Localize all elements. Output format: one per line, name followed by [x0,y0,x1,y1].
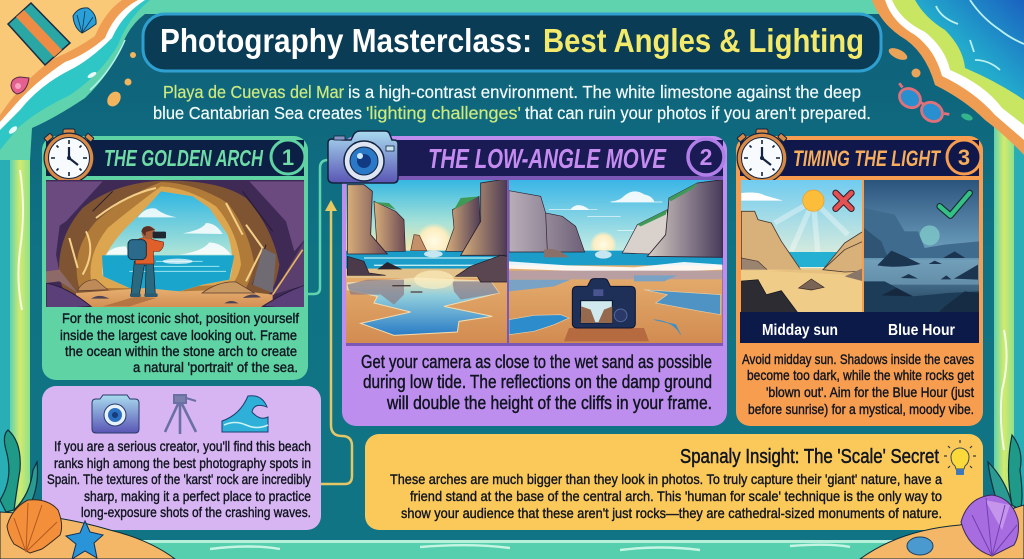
intro text: 'lighting challenges' [366,103,521,123]
body text: show your audience that these aren't just rocks—they are cathedral-sized monuments of nature. [401,505,942,521]
header: TIMING THE LIGHT [793,146,941,171]
body text: before sunrise) for a mystical, moody vibe. [748,401,974,417]
body text: ranks high among the best photography spots in [54,455,311,471]
body text: the ocean within the stone arch to create [65,343,297,359]
body text: inside the largest cave looking out. Frame [60,327,297,343]
icon: orange shell [7,500,62,553]
body text: For the most iconic shot, position yourself [62,310,299,326]
header: 2 [700,144,712,170]
intro text: blue Cantabrian Sea creates [153,103,362,123]
icon: blue pebble [907,537,933,555]
heading: Spanaly Insight: The 'Scale' Secret [680,446,939,468]
panel: timing the light [736,129,983,426]
header: 1 [282,145,294,170]
title banner: Best Angles & Lighting [543,22,864,59]
body text [390,471,942,521]
bottom-left beach [0,430,175,559]
body text: friend stand at the base of the central arch. This 'human for scale' technique is the only way to [410,488,942,504]
body text: become too dark, while the white rocks get [747,367,974,383]
icon: camera on sand [572,279,635,328]
body text [60,310,299,375]
intro text: Playa de Cuevas del Mar [163,82,344,102]
icon: stopwatch [736,129,788,184]
icon: sunglasses [891,81,950,128]
header: 3 [958,145,970,170]
icon: blue starfish [66,521,103,559]
panel: serious creator tip [42,386,321,530]
body text: Spain. The textures of the 'karst' rock are incredibly [47,471,311,487]
bottom-right beach [860,435,1024,559]
top-left beach corner [0,0,170,160]
body text: a natural 'portrait' of the sea. [133,359,298,375]
icon: pink snail shell [11,77,29,94]
intro text [153,82,871,123]
icon: header camera [328,131,398,183]
header: THE LOW-ANGLE MOVE [428,143,667,174]
intro text: that can ruin your photos if you aren't prepared. [525,103,871,123]
header [346,139,724,176]
body text [361,352,712,413]
illustration: low angle right [509,178,722,346]
body text: Get your camera as close to the wet sand as possible [361,352,712,372]
icon: seaweed [988,435,1022,510]
body text: Avoid midday sun. Shadows inside the caves [742,351,974,367]
panel: the low-angle move [342,136,727,426]
icon: tripod [165,395,196,434]
header [740,140,981,176]
panel: the golden arch [42,129,308,380]
panel: spanaly insight [365,434,983,530]
icon: blue shell [73,8,96,33]
icon: beach towel [8,3,70,65]
icon: stopwatch [44,129,94,184]
body text: long-exposure shots of the crashing waves. [81,504,311,520]
body text: 'blown out'. Aim for the Blue Hour (just [766,384,974,400]
icon: camera [92,395,139,433]
body text: sharp, making it a perfect place to practice [84,488,311,504]
body text: will double the height of the cliffs in your frame. [386,393,712,413]
icon: purple shell [961,495,1018,556]
icon: green check [940,193,970,216]
label band: Midday sun [762,322,838,339]
illustration: midday sun [738,178,863,313]
body text [47,438,311,520]
body text [742,351,974,417]
photographer [128,226,166,297]
icon: red cross [836,193,851,209]
header [46,140,305,176]
title banner: Photography Masterclass: [160,22,532,59]
body text: These arches are much bigger than they look in photos. To truly capture their 'giant' nature, have a [390,471,942,487]
intro text: is a high-contrast environment. The white limestone against the deep [348,82,861,102]
top-right water corner [872,0,1024,155]
illustration: blue hour [864,178,979,313]
icon: seaweed [0,430,38,512]
title banner [143,14,881,71]
illustration: cave arch photographer [46,178,306,310]
illustration: low angle left [344,178,507,346]
header: THE GOLDEN ARCH [104,145,263,171]
label band [740,312,979,343]
body text: If you are a serious creator, you'll find this beach [54,438,311,454]
label band: Blue Hour [888,322,955,339]
connector arrows [308,160,352,484]
icon: wave [222,396,268,432]
body text: during low tide. The reflections on the damp ground [363,372,712,392]
icon: light bulb [944,440,976,475]
